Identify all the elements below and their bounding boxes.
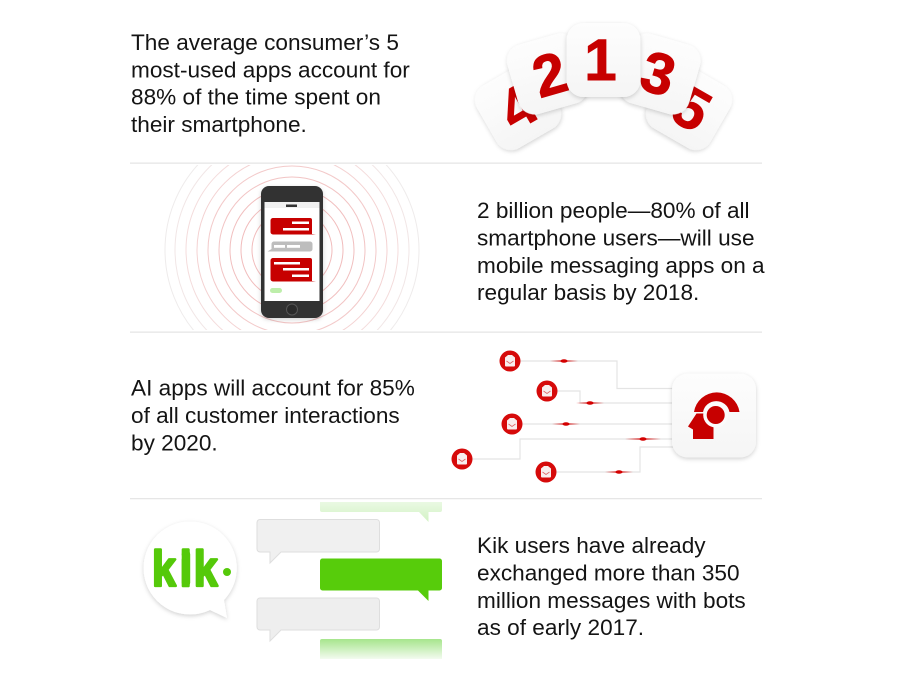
text: Kik statistic: exchanged more than 350 [477, 560, 740, 586]
card 3: 3 [633, 38, 682, 110]
card 5 [640, 58, 738, 156]
text: messaging statistic: regular basis by 2018. [477, 280, 699, 305]
card 1: 1 [584, 28, 617, 93]
text: AI statistic [131, 376, 415, 456]
text: top apps statistic: their smartphone. [131, 112, 307, 137]
icon: smartphone with messages [261, 186, 323, 318]
text: Kik statistic: million messages with bots [477, 588, 746, 613]
chat bubble: green [320, 558, 442, 601]
card 3 [615, 29, 705, 119]
text: top apps statistic [131, 30, 410, 137]
text: AI statistic: AI apps will account for 85% [131, 376, 415, 400]
message bubble: red bottom [270, 258, 316, 282]
text: AI statistic: of all customer interactions [131, 403, 400, 428]
text: Kik statistic: as of early 2017. [477, 615, 644, 640]
card 2 [503, 29, 592, 119]
text: messaging statistic: 2 billion people—80% of all [477, 198, 750, 223]
chat bubble: grey upper [257, 520, 380, 563]
icon: AI app with head logo [672, 374, 756, 458]
text: Kik statistic [477, 533, 746, 640]
text: top apps statistic: The average consumer’s 5 [131, 30, 399, 55]
text: messaging statistic: smartphone users—will use [477, 226, 755, 250]
card 4: 4 [488, 71, 548, 144]
text: AI statistic: by 2020. [131, 430, 218, 456]
chat bubble: faded green bottom [320, 639, 442, 659]
icon: signal rings around phone [164, 165, 420, 330]
icon: red message node 3 [502, 414, 522, 434]
card 5: 5 [661, 73, 722, 145]
typing indicator [270, 288, 282, 293]
icon: red message node 4 [452, 448, 472, 470]
card 2: 2 [525, 39, 574, 111]
message bubble: grey [268, 242, 312, 252]
text: top apps statistic: most-used apps account for [131, 58, 410, 82]
icon: Kik logo speech bubble: kik [152, 541, 218, 597]
icon: five numbered app cards [469, 23, 738, 156]
icon: red message node 2 [536, 380, 558, 402]
icon: red message node 5 [536, 462, 556, 482]
text: Kik statistic: Kik users have already [477, 533, 706, 558]
text: messaging statistic: mobile messaging apps on a [477, 253, 765, 278]
card 4 [469, 58, 567, 156]
icon: red message node 1 [500, 350, 520, 372]
diagram: connection lines to AI app [462, 359, 674, 474]
card 1 [566, 23, 640, 97]
chat bubble: faded green top [320, 502, 442, 522]
section dividers [130, 162, 762, 499]
message bubble: red top [270, 218, 316, 234]
text: top apps statistic: 88% of the time spent on [131, 84, 381, 110]
text: messaging statistic [477, 198, 765, 305]
chat bubble: grey lower [257, 598, 380, 641]
icon: Kik logo speech bubble [144, 521, 237, 618]
